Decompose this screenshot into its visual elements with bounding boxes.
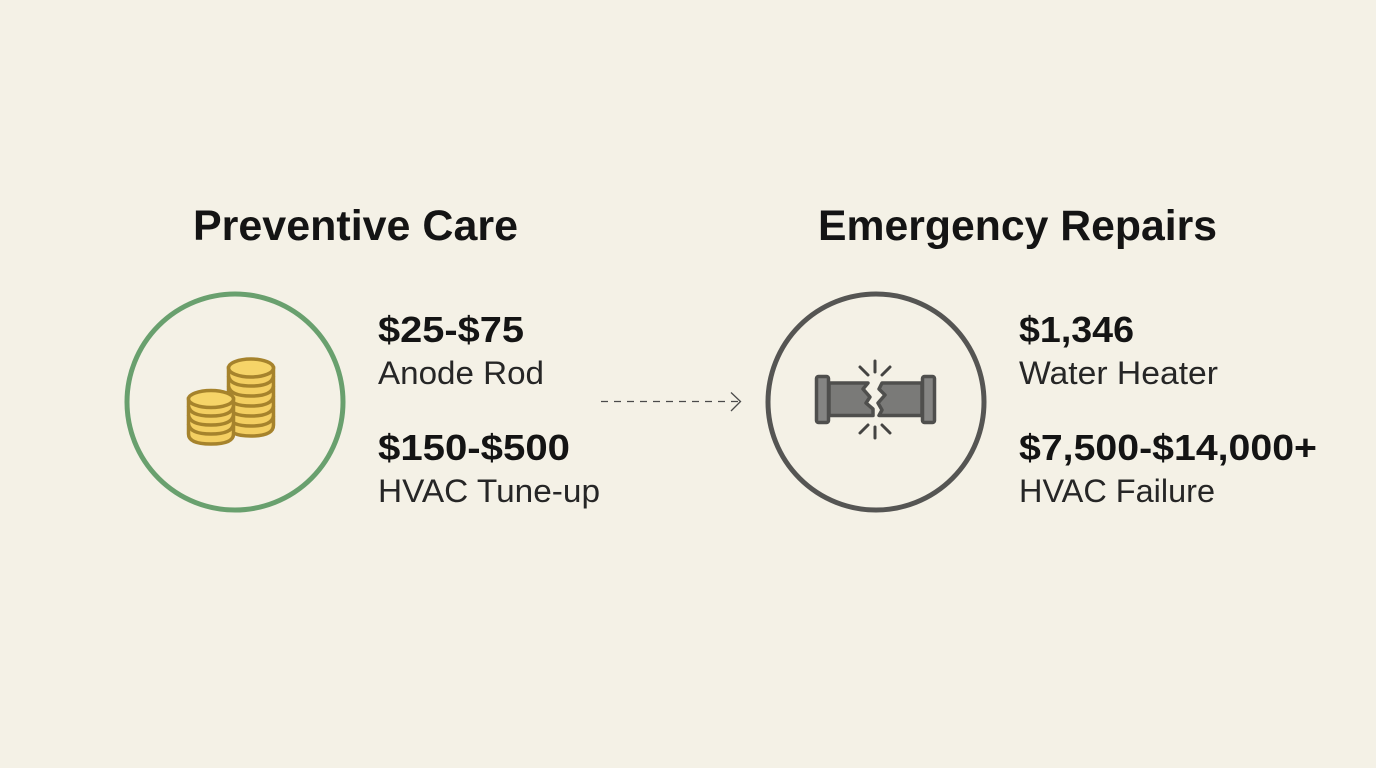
cost: anode rod: Anode Rod [378, 355, 544, 391]
cost: hvac failure: HVAC Failure [1019, 473, 1215, 509]
icon circle: green ring with coins [127, 294, 343, 510]
cost: hvac tune-up: HVAC Tune-up [378, 473, 600, 509]
heading: emergency repairs: Emergency Repairs [818, 202, 1217, 250]
cost: water heater: $1,346 [1019, 309, 1134, 350]
icon: left coin stack [188, 390, 234, 444]
cost: water heater [1019, 309, 1218, 391]
arrow: preventive to emergency [601, 392, 740, 411]
cost: hvac tune-up: $150-$500 [378, 427, 570, 468]
cost: hvac failure [1019, 427, 1317, 509]
icon circle: dark ring with broken pipe [768, 294, 984, 510]
icon: right coin stack [228, 359, 274, 436]
icon: broken pipe left half [829, 383, 873, 416]
icon: left flange [816, 376, 828, 422]
cost: hvac failure: $7,500-$14,000+ [1019, 427, 1317, 468]
cost: water heater: Water Heater [1019, 355, 1218, 391]
cost: hvac tune-up [378, 427, 600, 509]
icon: broken pipe right half [878, 383, 922, 416]
icon: crack sparks [860, 361, 890, 438]
panel: emergency repairs [768, 202, 1317, 510]
cost: anode rod: $25-$75 [378, 309, 524, 350]
panel: preventive care [127, 202, 600, 510]
icon: right flange [922, 376, 934, 422]
heading: preventive care: Preventive Care [193, 202, 518, 250]
cost: anode rod [378, 309, 544, 391]
